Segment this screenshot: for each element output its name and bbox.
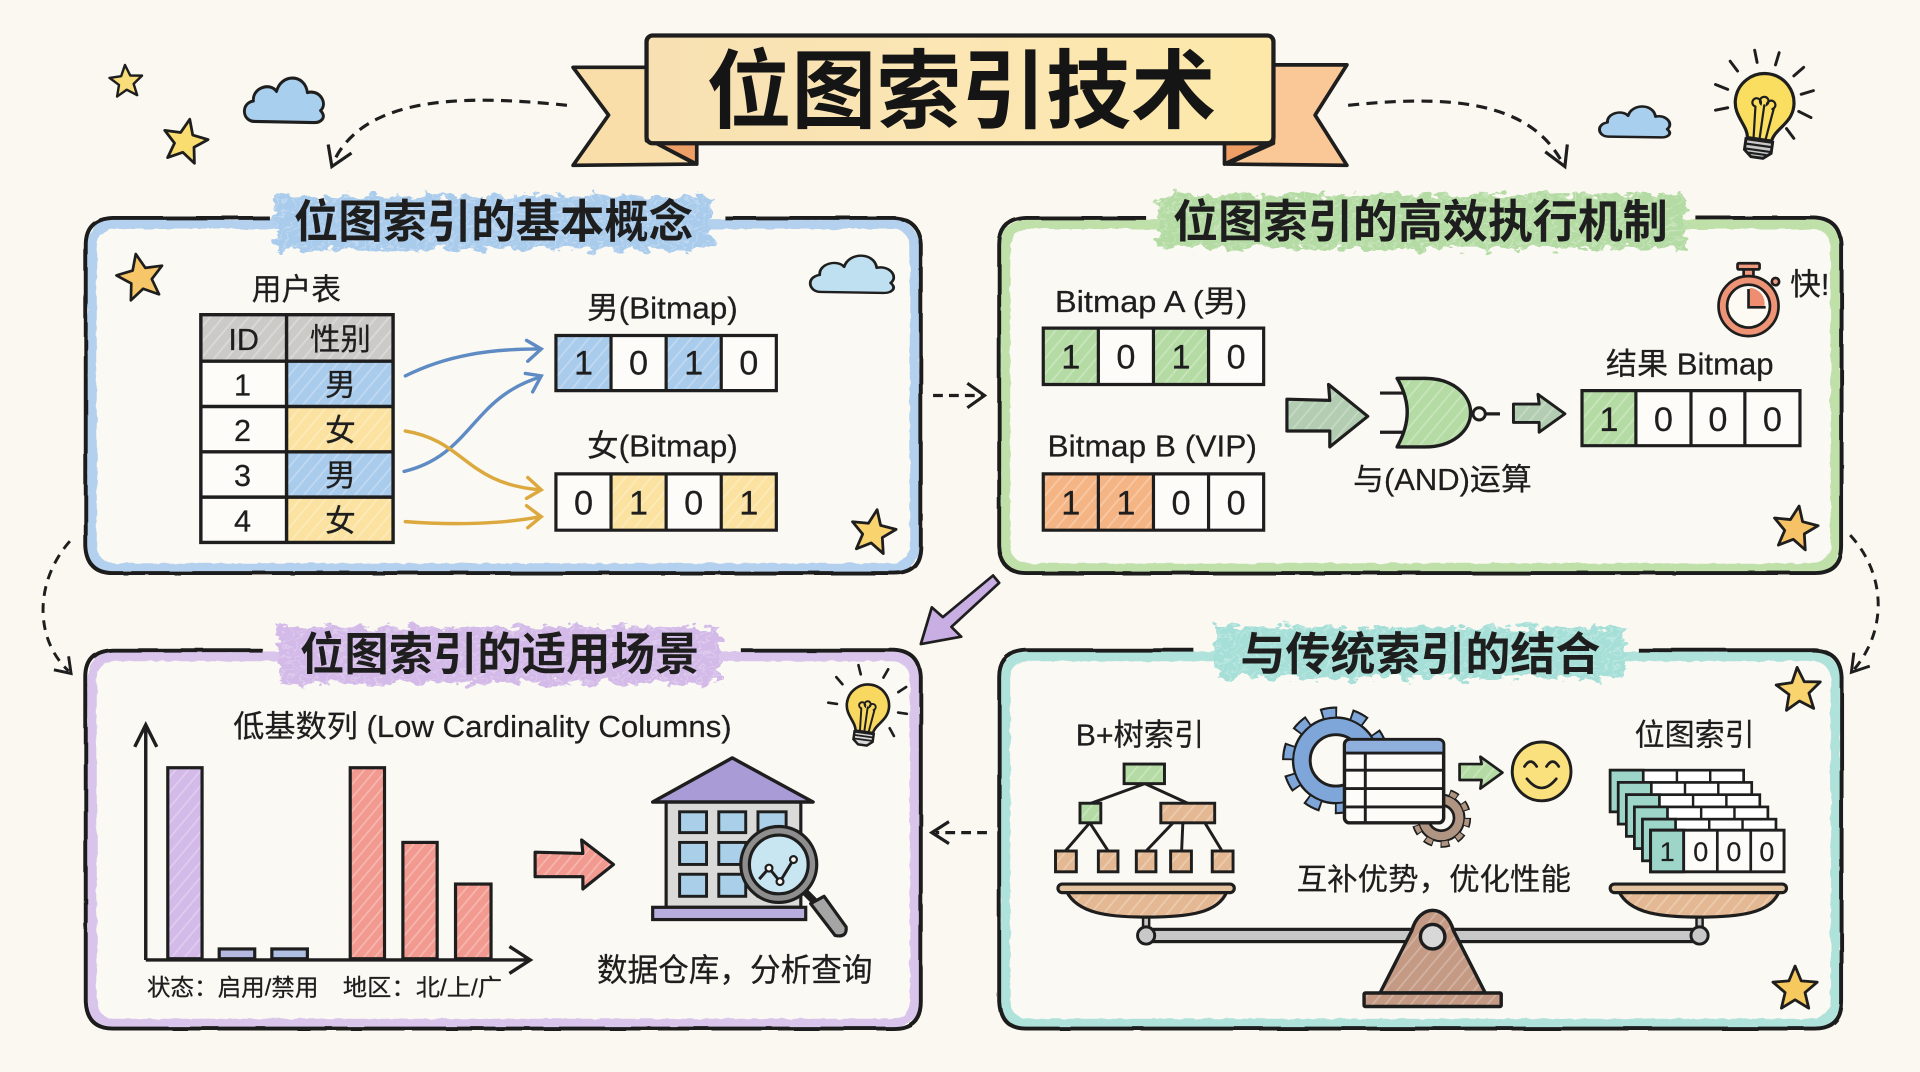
panel: execution mechanism (999, 195, 1842, 573)
bitmap label B: Bitmap B (VIP) (1048, 430, 1257, 464)
icon: light bulb (823, 662, 913, 750)
AND gate (1380, 378, 1500, 447)
warehouse caption: 数据仓库，分析查询 (597, 952, 872, 988)
bitmap: male: 1 (574, 345, 593, 383)
bitmap A (1043, 328, 1264, 384)
AND caption: 与(AND)运算 (1353, 463, 1532, 497)
decorative star (1775, 666, 1822, 711)
panel frame (86, 650, 921, 1029)
panel fill and colored band (1005, 224, 1835, 568)
left pan (1067, 891, 1227, 917)
banner right tail (1227, 65, 1347, 165)
icon: large gear (1288, 713, 1384, 808)
balance scale (1058, 884, 1786, 1006)
big arrow into gate (1287, 384, 1368, 447)
decorative star (109, 64, 143, 97)
heading: 位图索引的适用场景 (300, 629, 699, 680)
bitmap A: 0 (1116, 339, 1135, 377)
bitmap A: 1 (1061, 339, 1080, 377)
bars: status column (168, 768, 307, 959)
stacked bitmaps (1610, 770, 1784, 872)
user table: 性别 (310, 323, 371, 357)
scale posts (1146, 913, 1700, 933)
bitmap label A: Bitmap A (男) (1055, 285, 1247, 319)
heading: 位图索引的基本概念 (294, 197, 693, 248)
dashed arrow: mechanism to combination (1850, 535, 1878, 672)
icon: cloud (810, 256, 894, 293)
bitmap: female: 0 (684, 484, 703, 522)
panel fill and colored band (92, 656, 915, 1024)
user table: 3 (234, 459, 251, 493)
decorative star (113, 249, 168, 302)
bitmap: male (556, 335, 776, 391)
axes (135, 725, 530, 973)
panel: suitable scenarios (86, 627, 921, 1029)
icon: stopwatch (1719, 263, 1779, 336)
result bitmap: 0 (1708, 401, 1727, 439)
icon: data warehouse with magnifier (653, 758, 846, 936)
icon: light bulb (1715, 50, 1813, 162)
panel: basic concept (86, 196, 921, 573)
axis label: status: 状态：启用/禁用 (147, 974, 318, 1000)
bitmap label: female: 女(Bitmap) (587, 430, 738, 464)
bitmap label: male: 男(Bitmap) (587, 291, 738, 325)
beam (1145, 929, 1700, 942)
decorative star (848, 506, 899, 555)
panel fill and colored band (1005, 656, 1835, 1024)
fast label: 快! (1790, 268, 1829, 302)
B+ tree (1056, 764, 1233, 872)
B+ tree label: B+树索引 (1076, 719, 1204, 753)
axis label: region: 地区：北/上/广 (343, 974, 502, 1000)
bitmap B (1043, 474, 1264, 530)
panel frame (999, 218, 1842, 573)
heading highlight (1158, 195, 1685, 249)
heading: 与传统索引的结合 (1240, 629, 1600, 680)
bars: region column (350, 768, 491, 959)
icon: small gear (1415, 792, 1467, 844)
result label: 结果 Bitmap (1606, 348, 1774, 382)
icon: smiley face (1512, 742, 1571, 801)
decorative star (1773, 966, 1817, 1008)
panel: combination with traditional index (999, 627, 1842, 1029)
heading highlight (279, 627, 720, 683)
panel frame (86, 218, 921, 573)
arrow to smiley (1460, 757, 1502, 789)
user table (201, 315, 393, 542)
complementary caption: 互补优势，优化性能 (1297, 863, 1571, 897)
arrows: female rows to bitmap (405, 431, 541, 528)
bitmap: female: 1 (739, 484, 758, 522)
stacked bitmaps: 0 (1726, 837, 1741, 867)
decorative star (159, 115, 211, 165)
bitmap index label: 位图索引 (1635, 719, 1755, 753)
bitmap: male: 0 (629, 345, 648, 383)
bitmap B: 1 (1116, 484, 1135, 522)
heading: 位图索引的高效执行机制 (1173, 197, 1668, 248)
arrows: male rows to bitmap (404, 340, 541, 471)
panel fill and colored band (92, 224, 915, 568)
dashed arrow: title to concept panel (328, 100, 567, 167)
heading highlight (274, 196, 713, 250)
bitmap: female: 0 (574, 484, 593, 522)
heading highlight (1217, 627, 1626, 678)
title banner (573, 36, 1347, 165)
chart title: 低基数列 (Low Cardinality Columns) (233, 710, 732, 744)
dashed arrow: concept to scenarios (43, 541, 71, 673)
user table: 4 (234, 504, 251, 538)
icon: table (1344, 740, 1444, 823)
left fold (654, 142, 697, 164)
stacked bitmaps: 0 (1759, 837, 1774, 867)
fulcrum (1380, 910, 1485, 993)
dashed arrow: concept to mechanism (933, 383, 984, 408)
result bitmap: 1 (1599, 401, 1618, 439)
bitmap B: 0 (1227, 484, 1246, 522)
dashed arrow: title to mechanism panel (1348, 101, 1567, 167)
user table: 男 (325, 459, 356, 493)
user table: 女 (325, 504, 356, 538)
stacked bitmaps: 0 (1693, 837, 1708, 867)
result bitmap: 0 (1654, 401, 1673, 439)
small arrow to result (1513, 394, 1565, 432)
bitmap: male: 0 (739, 345, 758, 383)
bitmap B: 1 (1061, 484, 1080, 522)
user table: 男 (325, 368, 356, 402)
dashed arrow: combination to scenarios (932, 822, 987, 844)
bar chart (135, 725, 530, 1000)
result bitmap (1582, 391, 1800, 446)
user table: 女 (325, 414, 356, 448)
bitmap A: 0 (1227, 339, 1246, 377)
stacked bitmaps: 1 (1660, 837, 1675, 867)
purple arrow: mechanism to scenarios (921, 575, 999, 644)
icon: cloud (1599, 107, 1670, 137)
bitmap: female: 1 (629, 484, 648, 522)
icon: cloud (244, 78, 323, 123)
bitmap: female (556, 474, 776, 530)
right pan (1619, 891, 1779, 917)
red arrow to warehouse (535, 840, 613, 889)
banner body (647, 36, 1273, 143)
right fold (1224, 142, 1271, 164)
bitmap A: 1 (1171, 339, 1191, 377)
decorative star (1770, 502, 1821, 551)
result bitmap: 0 (1763, 401, 1782, 439)
table caption: 用户表 (252, 273, 341, 307)
banner left tail (573, 67, 696, 165)
user table: 1 (234, 368, 251, 402)
user table: 2 (234, 414, 251, 448)
bitmap: male: 1 (684, 345, 703, 383)
user table: ID (228, 323, 259, 357)
panel frame (999, 650, 1842, 1029)
title text: 位图索引技术 (707, 44, 1216, 140)
bitmap B: 0 (1171, 484, 1191, 522)
